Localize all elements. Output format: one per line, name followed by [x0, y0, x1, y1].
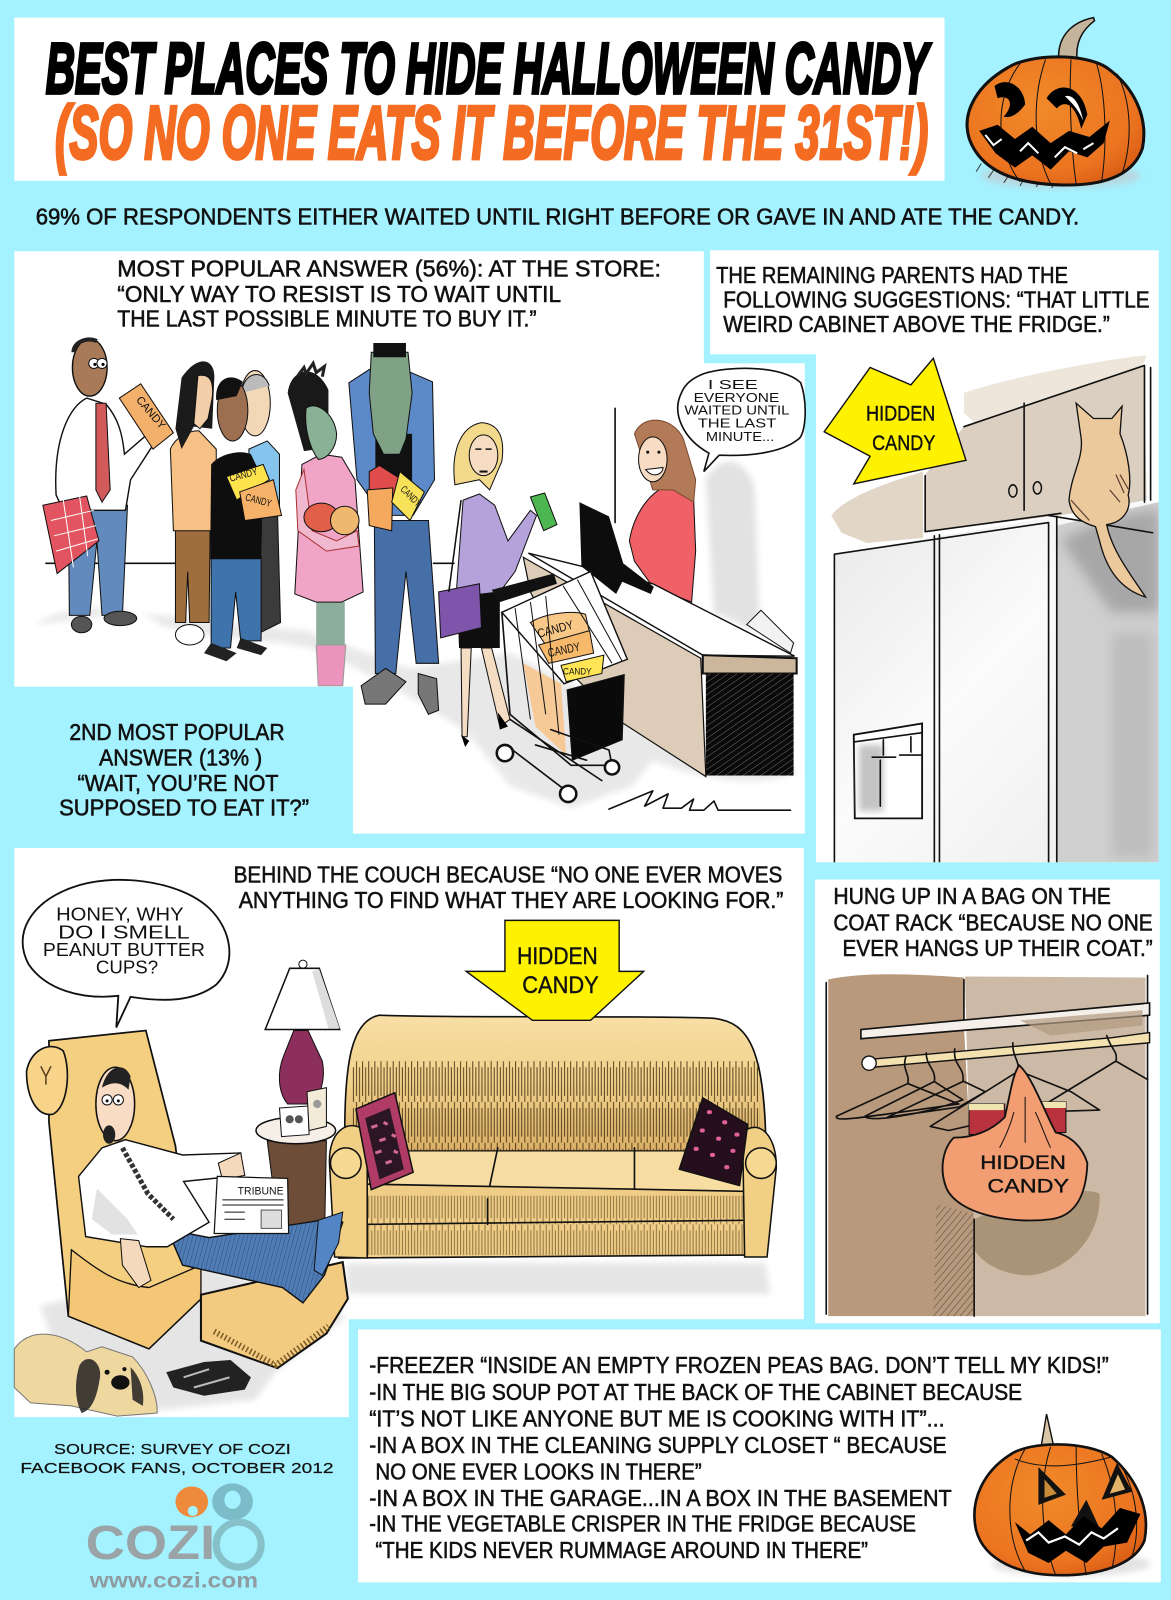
hatching: [933, 1204, 974, 1316]
subtitle statistic: 69% OF RESPONDENTS EITHER WAITED UNTIL RIGHT BEFORE OR GAVE IN AND ATE THE CANDY.: [36, 204, 1079, 230]
store caption: MOST POPULAR ANSWER (56%): AT THE STORE:: [117, 256, 661, 282]
cozi logo: [86, 1483, 261, 1592]
artist signature: [609, 791, 791, 810]
floor shadow: [41, 1263, 770, 1413]
cozi logo: www.cozi.com: [89, 1568, 258, 1592]
speech bubble: cashier: I SEE: [708, 377, 758, 392]
man in line: [43, 339, 173, 633]
list of answers: NO ONE EVER LOOKS IN THERE”: [375, 1458, 702, 1484]
speech bubble: husband: HONEY, WHY: [56, 903, 184, 924]
speech bubble: cashier: MINUTE...: [706, 429, 774, 444]
panel: at the store: [14, 251, 805, 834]
panel: cabinet above the fridge: [710, 250, 1159, 862]
title panel: [14, 18, 945, 181]
candy bags in cart: CANDY: [563, 667, 592, 677]
speech bubble: husband: PEANUT BUTTER: [43, 939, 205, 960]
arrow: hidden candy: [466, 920, 644, 1020]
list of answers: -IN A BOX IN THE GARAGE...IN A BOX IN THE BASEMENT: [369, 1485, 952, 1511]
source note: FACEBOOK FANS, OCTOBER 2012: [20, 1461, 334, 1477]
newspaper: TRIBUNE: [238, 1186, 284, 1198]
store caption: THE LAST POSSIBLE MINUTE TO BUY IT.”: [117, 306, 537, 332]
polka dot pillow: [679, 1098, 748, 1186]
fridge: [834, 502, 1159, 862]
wall lines: [46, 408, 615, 563]
source note: [20, 1442, 334, 1477]
bag of hidden candy: [943, 1065, 1087, 1221]
arrow: hidden candy: CANDY: [872, 431, 935, 455]
star pillow: [356, 1093, 413, 1190]
speech bubble: husband: DO I SMELL: [58, 922, 190, 943]
couch caption: [234, 862, 783, 913]
arrow: hidden candy: [824, 358, 966, 484]
water dispenser: [854, 723, 922, 818]
second answer text: 2ND MOST POPULAR: [69, 719, 285, 745]
icon: grinning pumpkin: [967, 18, 1144, 188]
candy bags in cart: [530, 612, 604, 682]
wall smudges: [831, 472, 923, 543]
list of answers: -IN THE VEGETABLE CRISPER IN THE FRIDGE BECAUSE: [369, 1510, 916, 1536]
side table with photos: [256, 1088, 336, 1245]
coat rack caption: [833, 883, 1153, 961]
cabinet caption: [716, 262, 1150, 337]
shoes on floor: [166, 1360, 251, 1396]
couch caption: ANYTHING TO FIND WHAT THEY ARE LOOKING FOR.”: [239, 887, 783, 913]
speech bubble: cashier: THE LAST: [698, 416, 777, 431]
shopping cart: [492, 572, 627, 802]
arrow: hidden candy: HIDDEN: [866, 402, 935, 426]
candy bags in cart: CANDY: [536, 618, 575, 641]
ottoman: [201, 1262, 348, 1368]
floor shadows: [36, 609, 801, 808]
speech bubble: cashier: EVERYONE: [694, 390, 779, 405]
source note: SOURCE: SURVEY OF COZI: [54, 1442, 291, 1458]
couch caption: BEHIND THE COUCH BECAUSE “NO ONE EVER MOVES: [234, 862, 782, 888]
list of answers: [369, 1352, 1109, 1563]
cabinet: [925, 365, 1151, 532]
list of answers: “IT’S NOT LIKE ANYONE BUT ME IS COOKING WITH IT”...: [369, 1405, 945, 1431]
cashier: [629, 420, 696, 602]
second answer text: ANSWER (13% ): [99, 744, 262, 770]
cozi logo: COZI: [86, 1517, 215, 1570]
store caption: [117, 256, 661, 332]
candy bags: CANDY: [244, 492, 273, 510]
kid with candy: [204, 377, 282, 661]
panel: behind the couch: [14, 848, 804, 1417]
candy bags: CANDY: [228, 467, 259, 485]
speech bubble: cashier: [678, 368, 805, 472]
arrow: hidden candy: CANDY: [522, 972, 599, 999]
boy behind: [240, 371, 281, 633]
closet walls: [826, 974, 1148, 1316]
list of answers: -IN THE BIG SOUP POT AT THE BACK OF THE CABINET BECAUSE: [369, 1379, 1022, 1405]
Frankenstein monster: [349, 343, 439, 714]
dog: [14, 1334, 157, 1416]
list of answers: “THE KIDS NEVER RUMMAGE AROUND IN THERE”: [375, 1537, 868, 1563]
cash register: [579, 502, 654, 594]
bag of hidden candy: CANDY: [987, 1176, 1069, 1198]
armchair: [27, 1031, 201, 1349]
newspaper: [214, 1176, 289, 1234]
list of answers: -FREEZER “INSIDE AN EMPTY FROZEN PEAS BAG. DON’T TELL MY KIDS!”: [369, 1352, 1109, 1378]
list of answers: -IN A BOX IN THE CLEANING SUPPLY CLOSET “ BECAUSE: [369, 1432, 947, 1458]
hangers: [836, 1036, 1148, 1130]
panel: other hiding places: [358, 1329, 1161, 1582]
store caption: “ONLY WAY TO RESIST IS TO WAIT UNTIL: [117, 281, 561, 307]
candy box: [119, 384, 173, 449]
lamp: [265, 960, 340, 1104]
candy bags in cart: CANDY: [546, 640, 581, 660]
icon: jack-o-lantern: [974, 1414, 1151, 1576]
bag of hidden candy: HIDDEN: [980, 1152, 1066, 1174]
second answer text: [59, 719, 309, 820]
checkout counter: [523, 553, 797, 777]
cabinet caption: WEIRD CABINET ABOVE THE FRIDGE.”: [723, 311, 1110, 337]
candy bags: [367, 465, 424, 531]
second answer text: SUPPOSED TO EAT IT?”: [59, 794, 309, 820]
blonde shopper: [439, 423, 557, 747]
cabinet caption: THE REMAINING PARENTS HAD THE: [716, 262, 1068, 288]
speech bubble: husband: CUPS?: [96, 956, 158, 977]
arrow: hidden candy: HIDDEN: [517, 943, 598, 970]
speech bubble: cashier: WAITED UNTIL: [684, 402, 790, 417]
speech bubble: husband: [23, 880, 229, 1027]
coat rack caption: HUNG UP IN A BAG ON THE: [833, 883, 1111, 909]
cat on fridge: [1069, 403, 1145, 597]
candy bags: CANDY: [398, 484, 423, 509]
bride of Frankenstein: [288, 363, 363, 686]
woman in line: [170, 361, 216, 645]
panel: coat rack: [815, 880, 1160, 1323]
candy bags: [226, 464, 282, 521]
candy box: CANDY: [133, 394, 168, 432]
couch: [329, 1015, 776, 1258]
second answer text: “WAIT, YOU’RE NOT: [78, 770, 278, 796]
man reading newspaper: [79, 1067, 343, 1303]
shelf and rod: [861, 1003, 1150, 1070]
